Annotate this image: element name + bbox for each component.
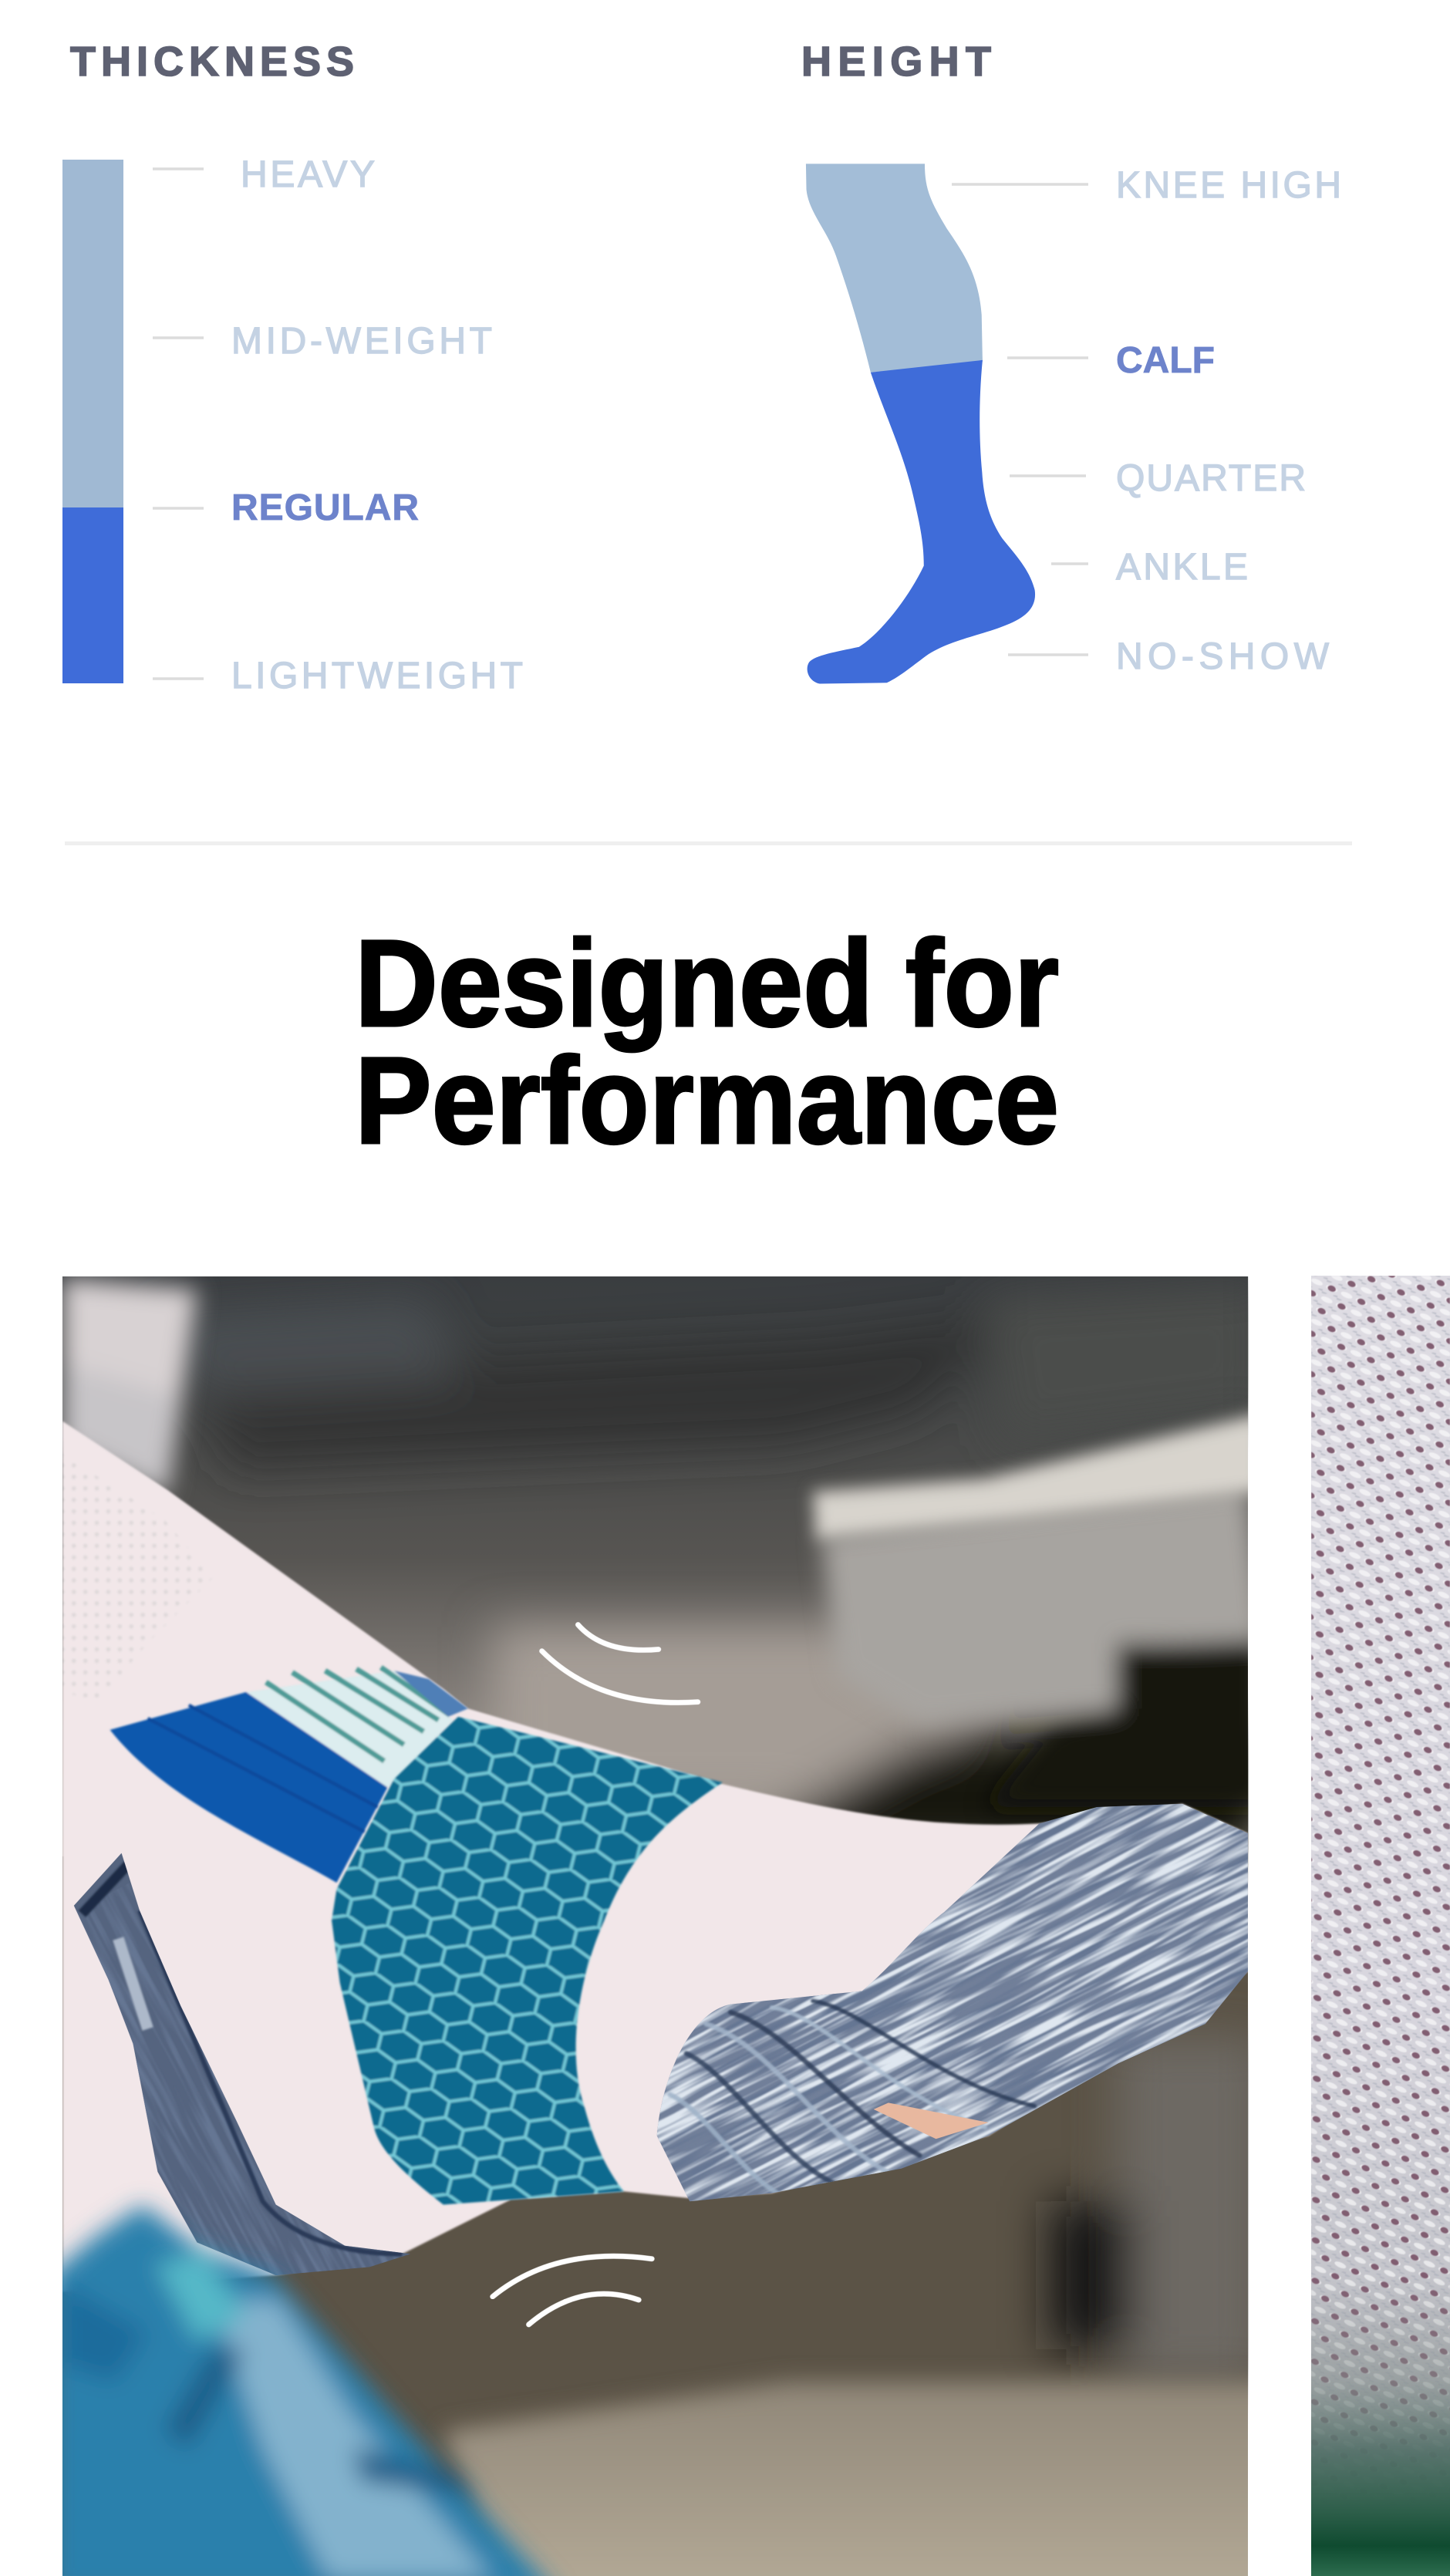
title: Designed for	[355, 914, 1059, 1052]
blue rib panel	[110, 1667, 468, 1883]
label: calf (selected): CALF	[1116, 340, 1215, 381]
label: quarter: QUARTER	[1116, 458, 1306, 499]
icon: flex arcs below heel	[493, 2256, 652, 2325]
label: knee high: KNEE HIGH	[1116, 165, 1341, 206]
sock body	[62, 1421, 1248, 2291]
toe knit	[657, 1803, 1248, 2201]
panel: height scale	[801, 39, 1341, 684]
panel: thickness scale	[62, 39, 523, 696]
panel: close-up photo of knit fabric	[1311, 1276, 1450, 2576]
panel: photo of sock on foot	[62, 1276, 1248, 2576]
label: mid-weight: MID-WEIGHT	[231, 321, 492, 362]
label: no-show: NO-SHOW	[1116, 636, 1330, 677]
title	[355, 914, 1059, 1169]
icon: leg and sock silhouette	[806, 164, 1035, 684]
thickness bar	[62, 160, 123, 683]
title: Performance	[355, 1031, 1059, 1169]
label: heavy: HEAVY	[241, 154, 375, 195]
heading: height: HEIGHT	[801, 39, 991, 85]
heel knit band	[74, 1853, 410, 2275]
label: lightweight: LIGHTWEIGHT	[231, 656, 523, 696]
label: ankle: ANKLE	[1116, 547, 1248, 588]
icon: flex arcs above ankle	[542, 1625, 698, 1703]
heading: thickness: THICKNESS	[70, 39, 354, 85]
teal honeycomb mesh panel	[332, 1717, 723, 2204]
photo background	[62, 1276, 1281, 2576]
peach skin patch	[874, 2102, 989, 2139]
shoe	[49, 2204, 558, 2576]
label: regular (selected): REGULAR	[231, 487, 419, 528]
